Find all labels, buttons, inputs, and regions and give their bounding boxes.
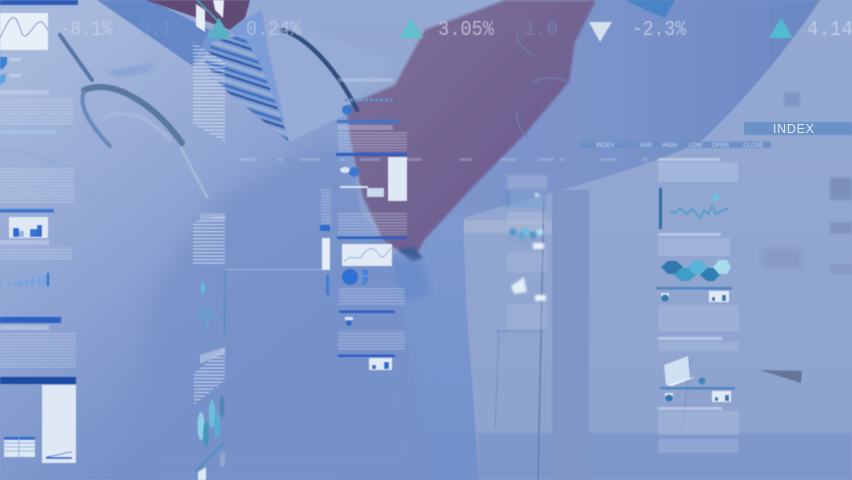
text block (507, 212, 546, 224)
tall white card (388, 157, 407, 201)
table header strip (580, 142, 771, 149)
heading and text (658, 407, 722, 410)
faint ticker value: 5.1 (140, 19, 172, 42)
striped tie (205, 35, 289, 142)
text block (507, 252, 546, 272)
table header strip: VAR (640, 143, 653, 149)
small legend icons (362, 270, 368, 285)
neck skin (145, 0, 250, 30)
pie chart (342, 269, 358, 285)
blue shirt cuff at top (625, 0, 675, 18)
line chart card (0, 13, 48, 50)
rule (337, 236, 407, 239)
small card and line (340, 186, 384, 197)
rule (339, 310, 395, 313)
blue rule (0, 209, 54, 212)
data table (4, 437, 35, 457)
hexagon row (661, 260, 731, 281)
laptop (511, 277, 527, 294)
right shirt collar (230, 10, 288, 140)
text block (338, 213, 407, 235)
growing bars (0, 273, 49, 286)
blue shirt cuff at wrist (390, 256, 430, 302)
ticker value -8.1%: -8.1% (60, 19, 112, 42)
heading and text (658, 233, 721, 236)
lab coat lower sleeve (130, 135, 430, 480)
upper right coat lapel (262, 10, 392, 142)
small white card (196, 4, 205, 32)
panel: right data column (656, 158, 739, 453)
icon and thumbnail (661, 291, 729, 302)
rule with thumbnail (507, 240, 547, 249)
blue rule (0, 317, 61, 323)
text block (0, 90, 49, 95)
hand and forearm (346, 0, 596, 256)
table header strip: CLOSE (743, 143, 763, 149)
white pointer (213, 0, 224, 18)
heading (658, 158, 720, 161)
text block (0, 167, 74, 203)
table header strip: HIGH (662, 143, 677, 149)
icon and thumbnail (665, 391, 731, 402)
glow line (0, 130, 56, 134)
text block (658, 305, 739, 331)
table header strip: LOW (689, 143, 703, 149)
pale down arrow (589, 22, 612, 42)
teal up arrow (399, 18, 423, 38)
index label bar (744, 122, 852, 136)
text block (507, 304, 546, 330)
dark wrist shadow (398, 246, 423, 262)
slanted text block lower (194, 347, 225, 405)
stethoscope (60, 30, 357, 197)
blue shirt collar area (97, 0, 210, 66)
table header strip: INDEX (596, 143, 614, 149)
narrow inner column (320, 188, 331, 295)
lower right coat sleeve (340, 205, 479, 480)
top header bar (0, 0, 78, 5)
lab coat torso (0, 0, 430, 480)
panel: centre column (225, 78, 407, 370)
small shield icons (0, 57, 21, 85)
line chart card (342, 244, 392, 266)
teal up arrow (769, 18, 793, 38)
header text (507, 175, 547, 189)
text block (338, 125, 393, 130)
panel: angled narrow column (193, 0, 225, 480)
panel: left data column (0, 0, 78, 463)
mini bar chart card (9, 217, 48, 238)
perspective heading (200, 213, 225, 220)
ticker value 0.24%: 0.24% (246, 19, 301, 42)
text block (0, 325, 49, 330)
ticker row: percentages and arrows (60, 18, 852, 42)
small icon (345, 317, 353, 326)
laptop illustration (664, 356, 706, 386)
dotted chart row (345, 98, 392, 102)
slanted text blocks (193, 42, 225, 142)
text block (0, 240, 49, 245)
ticker value -2.3%: -2.3% (632, 19, 686, 42)
teal rule and tiles (195, 441, 225, 472)
mini bars card (369, 358, 392, 370)
text block (658, 162, 738, 182)
header text (338, 78, 393, 82)
text block (338, 331, 405, 351)
left shirt collar (193, 30, 232, 66)
teal ovals (198, 396, 224, 447)
faint circular marks over the hand (517, 28, 568, 137)
ticker value 3.05%: 3.05% (438, 19, 494, 42)
faint ticker value: 1.0 (524, 19, 558, 42)
text block (339, 288, 405, 306)
panel: middle right column (507, 175, 547, 330)
pulse chart (659, 188, 728, 229)
lab coat fold (0, 150, 130, 240)
rule (338, 354, 395, 357)
index label bar: INDEX (773, 122, 815, 136)
pulse chart (198, 270, 225, 335)
thumbnail (535, 295, 546, 301)
dotted data row (238, 158, 648, 161)
rule (336, 153, 407, 156)
table header strip: OPEN (712, 143, 729, 149)
icon cluster (340, 167, 359, 177)
rule (660, 387, 735, 390)
text block (658, 439, 738, 453)
small pie icon (342, 105, 352, 115)
faint hairline (225, 269, 322, 270)
rule (656, 287, 732, 290)
collar fold (105, 62, 155, 78)
heading and text (658, 337, 722, 340)
rule (337, 120, 399, 123)
chart block (507, 191, 547, 207)
teal up arrow (207, 18, 231, 38)
teal line (197, 0, 219, 22)
dark header bar (0, 377, 76, 384)
hex row (510, 228, 544, 238)
dark sleeve band, upper right (420, 0, 820, 244)
tall chart card (42, 385, 76, 463)
